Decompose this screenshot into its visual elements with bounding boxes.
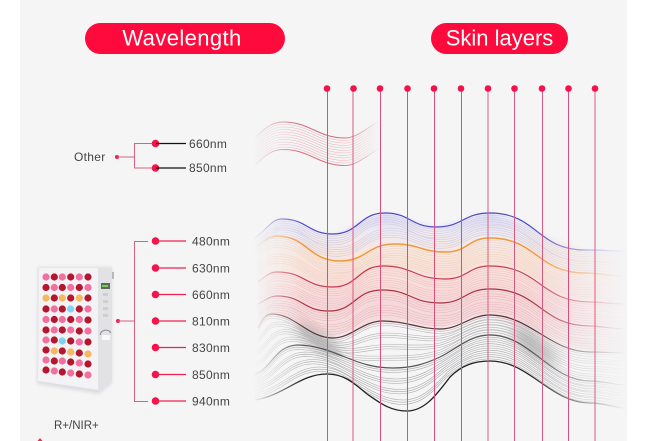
skin layer markers: vertical lines with dots bbox=[324, 85, 598, 441]
other group labels and connectors: Other bbox=[74, 150, 106, 164]
icon: cropped red marker at bottom edge bbox=[38, 438, 42, 441]
band: 830nm grey bbox=[256, 316, 625, 381]
wavelength labels and connectors bbox=[116, 234, 230, 408]
device caption: R+/NIR+ bbox=[54, 420, 99, 432]
heading pill: Skin layers: Skin layers bbox=[446, 26, 553, 50]
band: 630nm orange bbox=[258, 238, 625, 299]
wavelength labels and connectors: 480nm bbox=[192, 234, 230, 248]
band: 850nm dark grey bbox=[255, 337, 625, 406]
icon: LED panel device bbox=[37, 267, 114, 394]
wavelength labels and connectors: 660nm bbox=[192, 288, 230, 302]
wavelength labels and connectors: 830nm bbox=[192, 341, 230, 355]
band: 810nm dark red bbox=[258, 291, 625, 351]
heading pill: Skin layers bbox=[431, 23, 568, 54]
main curves of each wavelength bbox=[255, 213, 625, 411]
wavelength labels and connectors: 630nm bbox=[192, 262, 230, 276]
band: 660nm red bbox=[258, 268, 625, 325]
wavelength labels and connectors: 810nm bbox=[192, 314, 230, 328]
wavelength labels and connectors: 940nm bbox=[192, 394, 230, 408]
heading pill: Wavelength bbox=[85, 23, 285, 54]
other group labels and connectors: 850nm bbox=[189, 161, 227, 175]
wave tint background bbox=[267, 214, 597, 368]
other group labels and connectors bbox=[74, 137, 227, 175]
wave band: other wavelengths bbox=[255, 122, 378, 166]
band: 480nm blue bbox=[264, 215, 603, 271]
wave stack: skin layer curves bbox=[255, 213, 625, 411]
other group labels and connectors: 660nm bbox=[189, 137, 227, 151]
heading pill: Wavelength: Wavelength bbox=[122, 26, 242, 50]
wavelength labels and connectors: 850nm bbox=[192, 368, 230, 382]
